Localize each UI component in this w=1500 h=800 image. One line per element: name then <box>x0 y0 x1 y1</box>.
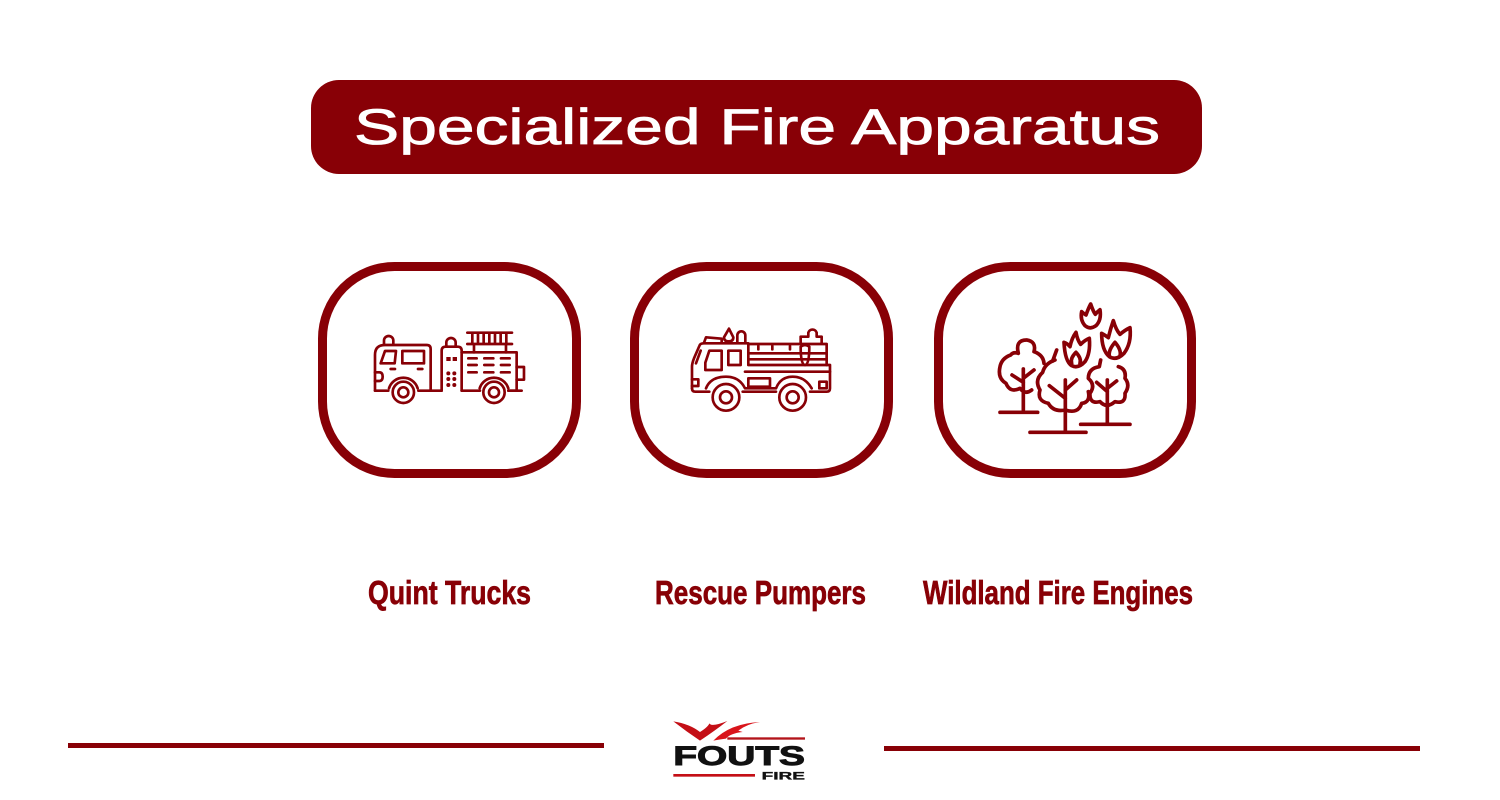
icon: rescue pumper truck <box>692 329 830 411</box>
panel: Quint Trucks icon card <box>322 266 576 474</box>
right footer line <box>884 746 1420 751</box>
left footer line <box>68 743 604 748</box>
icon: burning trees <box>999 304 1130 432</box>
label: Wildland Fire Engines: Wildland Fire Engines <box>923 574 1193 611</box>
title banner <box>311 80 1202 174</box>
logo flame swoosh <box>673 721 805 741</box>
panel: Rescue Pumpers icon card <box>634 266 888 474</box>
logo: Fouts Fire <box>673 721 805 782</box>
logo: Fouts Fire: FOUTS <box>673 741 805 771</box>
icon: quint fire truck <box>375 333 524 403</box>
logo: Fouts Fire: FIRE <box>762 770 805 782</box>
panel: Wildland Fire Engines icon card <box>938 266 1192 474</box>
title banner: Specialized Fire Apparatus <box>354 99 1160 155</box>
label: Rescue Pumpers: Rescue Pumpers <box>655 574 866 611</box>
label: Quint Trucks: Quint Trucks <box>368 574 531 611</box>
